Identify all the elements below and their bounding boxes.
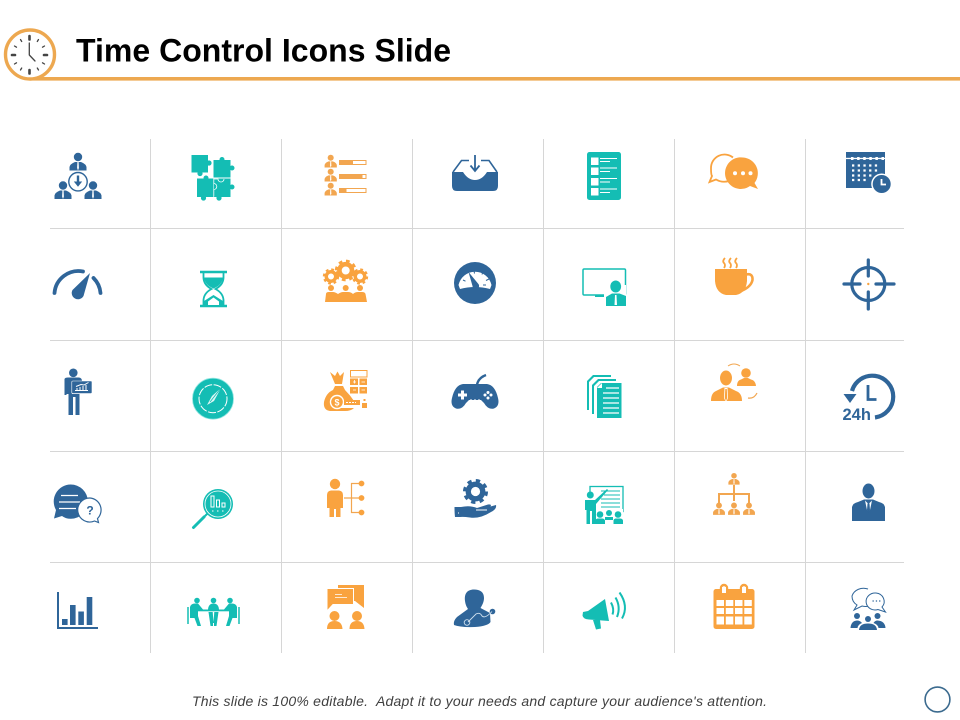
icon: hourglass [200,272,227,306]
icon: 24 hour clock [842,376,893,424]
page marker circle [925,687,950,712]
footer note: This slide is 100% editable. Adapt it to your needs and capture your audience's attention. [192,693,767,709]
icon: person with tree [327,479,364,517]
icon: people exchange [711,364,757,402]
icon: coffee cup [715,258,753,295]
icon: teacher with audience [584,486,623,525]
icon: teal compass [192,378,234,419]
icon: bar chart [57,592,98,629]
icon: puzzle pieces [192,155,234,201]
icon: person holding chart [64,368,92,415]
icon: game controller [452,375,498,409]
icon: clock logo [6,30,54,79]
icon: 24 hour clock: 24h [842,406,871,424]
icon: people progress list [325,155,366,195]
icon: chat bubbles [710,154,758,189]
icon: magnifier with chart [194,489,233,528]
icon: businessman [852,484,885,521]
icon: presenter at whiteboard [583,269,626,306]
icon: dashboard dial [454,262,496,304]
header rule [30,77,960,81]
icon: stacked documents [587,375,622,418]
icon: person with line graph [454,590,495,627]
icon: chat with question: ? [86,504,94,518]
icon: money bag with calculator [324,370,367,411]
icon: money bag with calculator: $ [334,398,340,408]
icon: team with gears [324,261,367,302]
icon: team meeting [188,598,239,626]
icon: calendar with clock [846,152,892,194]
icon: inbox tray [452,155,498,191]
icon: checklist document [587,152,621,200]
icon: speedometer arc [54,271,100,299]
icon: team with download circle [54,153,102,199]
icon: orange calendar [714,585,754,629]
icon: gear on hand [454,481,496,518]
icon: crosshair target [844,260,894,309]
icon: org hierarchy [713,473,755,515]
title: Time Control Icons Slide [76,32,451,68]
icon: chat with question [54,484,101,522]
icon: group chat [850,588,886,630]
icon: discussion speech bubbles [327,585,364,629]
icon: megaphone [582,592,625,630]
